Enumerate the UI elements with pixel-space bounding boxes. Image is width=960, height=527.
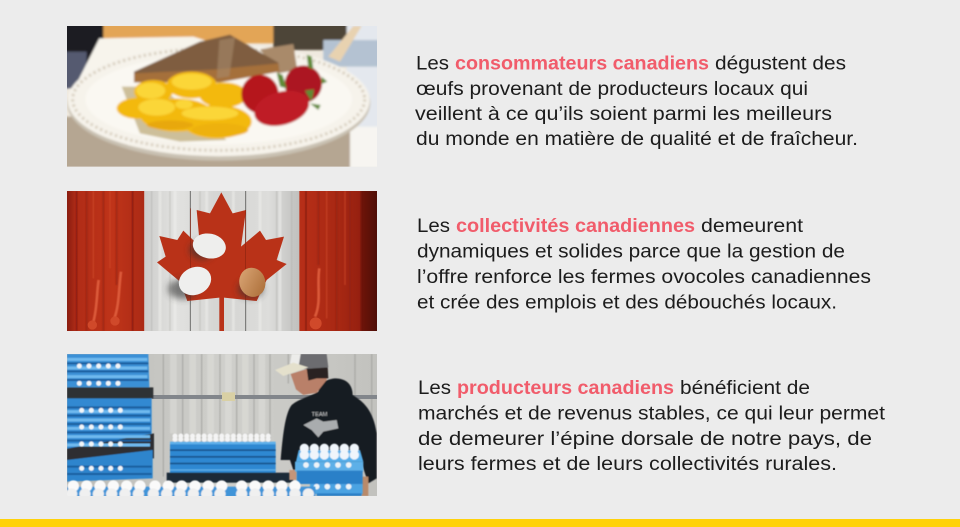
- text block: communities: dynamiques et solides parce que la gestion de: [417, 242, 845, 262]
- flag: left red band: [67, 191, 144, 331]
- icon: white egg bottom: [178, 266, 212, 296]
- photo: farmer carrying trays of eggs: [67, 354, 377, 497]
- text block: producers: de demeurer l’épine dorsale de notre pays, de: [418, 429, 872, 450]
- text block: consumers: Les: [416, 54, 449, 74]
- text block: producers: Les: [418, 378, 451, 399]
- highlight: collectivités canadiennes: collectivités canadiennes: [456, 216, 695, 237]
- scrambled egg: [117, 72, 252, 138]
- photo: Canadian flag painted on wood with three eggs: [67, 191, 377, 331]
- text block: communities: demeurent: [701, 216, 804, 237]
- bottom yellow bar: [0, 519, 960, 527]
- hoodie print: [303, 418, 338, 437]
- text block: communities: et crée des emplois et des débouchés locaux.: [417, 292, 837, 314]
- flag: right red band: [299, 191, 377, 331]
- photo: scrambled eggs, toast and strawberries on a plate: [63, 23, 380, 170]
- egg shadows: [168, 241, 263, 299]
- text block: consumers: du monde en matière de qualité et de fraîcheur.: [416, 129, 858, 150]
- text block: producers: bénéficient de: [680, 378, 810, 399]
- middle stack of egg trays: [167, 436, 293, 483]
- text block: consumers: œufs provenant de producteurs locaux qui: [416, 79, 808, 100]
- cap: [298, 354, 328, 369]
- text block: consumers: dégustent des: [715, 54, 846, 74]
- text block: producers: leurs fermes et de leurs collectivités rurales.: [418, 454, 837, 475]
- text block: producers: marchés et de revenus stables, ce qui leur permet: [418, 404, 886, 424]
- text block: communities: [417, 216, 871, 314]
- hoodie: [281, 378, 377, 483]
- text block: consumers: [415, 54, 858, 150]
- text block: communities: Les: [417, 216, 450, 237]
- highlight: producteurs canadiens: producteurs canadiens: [457, 378, 674, 399]
- trays carried by farmer: [295, 448, 363, 496]
- icon: brown egg: [239, 268, 266, 297]
- plate: [67, 99, 371, 162]
- strawberries: [285, 65, 322, 103]
- icon: maple leaf: [157, 192, 287, 331]
- corrugated wall: [67, 354, 377, 496]
- farmer: TEAM: [312, 412, 328, 418]
- text block: communities: l’offre renforce les fermes ovocoles canadiennes: [417, 267, 871, 288]
- text block: producers: [418, 378, 886, 475]
- face: [291, 365, 328, 395]
- farmer: [275, 354, 377, 496]
- front row of white eggs: [67, 486, 315, 497]
- blue tray stack left: [67, 354, 154, 482]
- toast: [260, 44, 297, 73]
- highlight: consommateurs canadiens: consommateurs canadiens: [455, 54, 709, 74]
- icon: white egg top: [192, 234, 226, 258]
- flag: white centre: [144, 191, 299, 331]
- text block: consumers: veillent à ce qu’ils soient parmi les meilleurs: [415, 104, 832, 125]
- egg shadow: [122, 87, 227, 142]
